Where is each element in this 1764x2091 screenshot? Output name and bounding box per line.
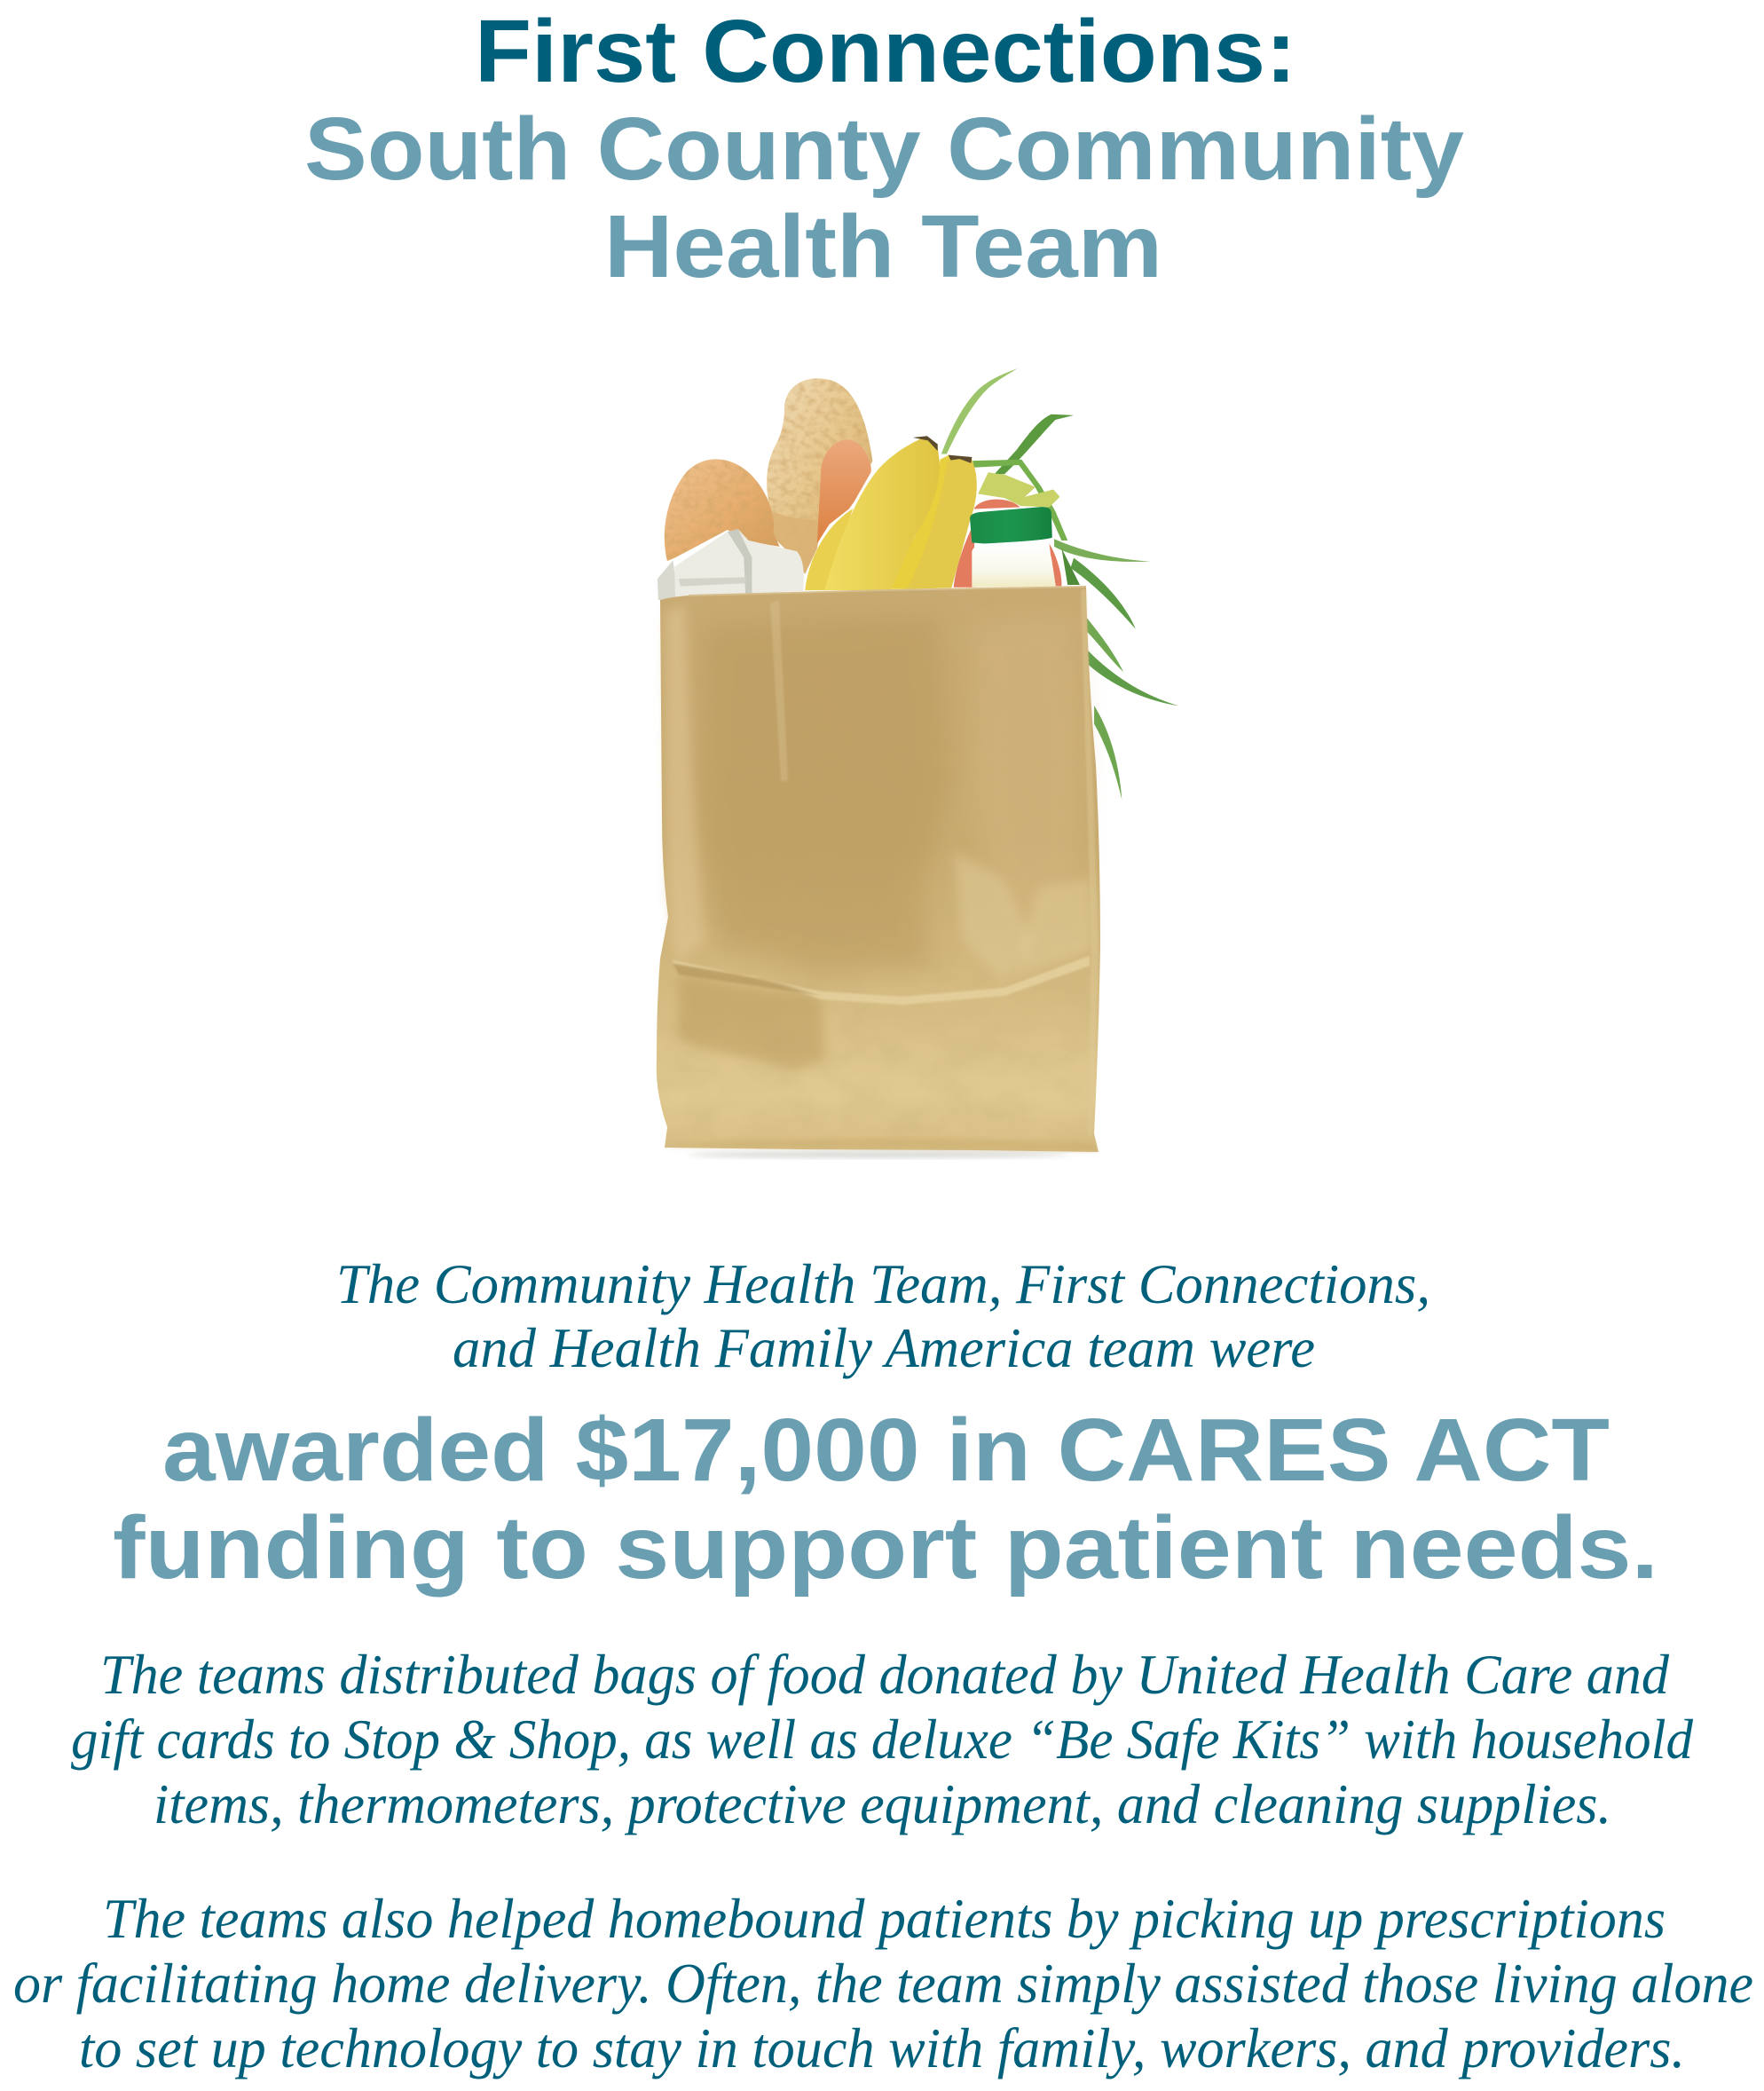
paper bag xyxy=(657,587,1100,1152)
intro line 2: and Health Family America team were xyxy=(453,1317,1315,1379)
paragraph 2 line 2: or facilitating home delivery. Often, the team simply assisted those living alone xyxy=(13,1953,1753,2015)
bottle cap xyxy=(970,507,1052,543)
green onion stalks xyxy=(941,368,1179,800)
intro line 1: The Community Health Team, First Connections, xyxy=(336,1253,1430,1315)
middle banana ridge xyxy=(890,455,949,589)
back bread loaf xyxy=(767,378,872,574)
paragraph 1 line 1: The teams distributed bags of food donated by United Health Care and xyxy=(100,1644,1669,1706)
icon: grocery bag illustration xyxy=(657,368,1179,1158)
bottle body xyxy=(972,541,1056,588)
groceries above the bag xyxy=(658,368,1179,800)
bananas xyxy=(805,436,977,590)
apple behind the bottle xyxy=(954,500,1061,588)
bag shading and creases xyxy=(665,589,1099,1151)
paragraph 2 line 3: to set up technology to stay in touch with family, workers, and providers. xyxy=(79,2017,1685,2079)
main banana xyxy=(824,437,940,590)
banana stem tips xyxy=(913,436,972,463)
paragraph 2 line 1: The teams also helped homebound patients by picking up prescriptions xyxy=(103,1888,1666,1950)
title xyxy=(304,2,1464,296)
title line: Health Team: Health Team xyxy=(604,197,1162,296)
text block: distribution paragraph xyxy=(71,1644,1693,1835)
title line: First Connections: First Connections: xyxy=(475,2,1296,101)
text block: homebound patients paragraph xyxy=(13,1888,1753,2079)
lettuce xyxy=(978,472,1059,507)
serrated bag rim xyxy=(689,587,1086,596)
carrot xyxy=(817,439,871,543)
egg carton xyxy=(658,529,804,600)
small banana xyxy=(805,509,853,590)
headline line 1: awarded $17,000 in CARES ACT xyxy=(162,1401,1610,1500)
far banana xyxy=(906,455,977,589)
back bread shadow xyxy=(772,511,820,574)
paragraph 1 line 3: items, thermometers, protective equipment, and cleaning supplies. xyxy=(154,1773,1611,1835)
front bread loaf xyxy=(665,459,780,561)
bag silhouette xyxy=(657,587,1100,1152)
title line: South County Community: South County Community xyxy=(304,99,1464,199)
intro text xyxy=(336,1253,1430,1379)
bag ground shadow xyxy=(688,1151,1069,1158)
paragraph 1 line 2: gift cards to Stop & Shop, as well as deluxe “Be Safe Kits” with household xyxy=(71,1708,1693,1771)
headline line 2: funding to support patient needs. xyxy=(113,1498,1658,1598)
callout: funding headline xyxy=(113,1401,1658,1598)
